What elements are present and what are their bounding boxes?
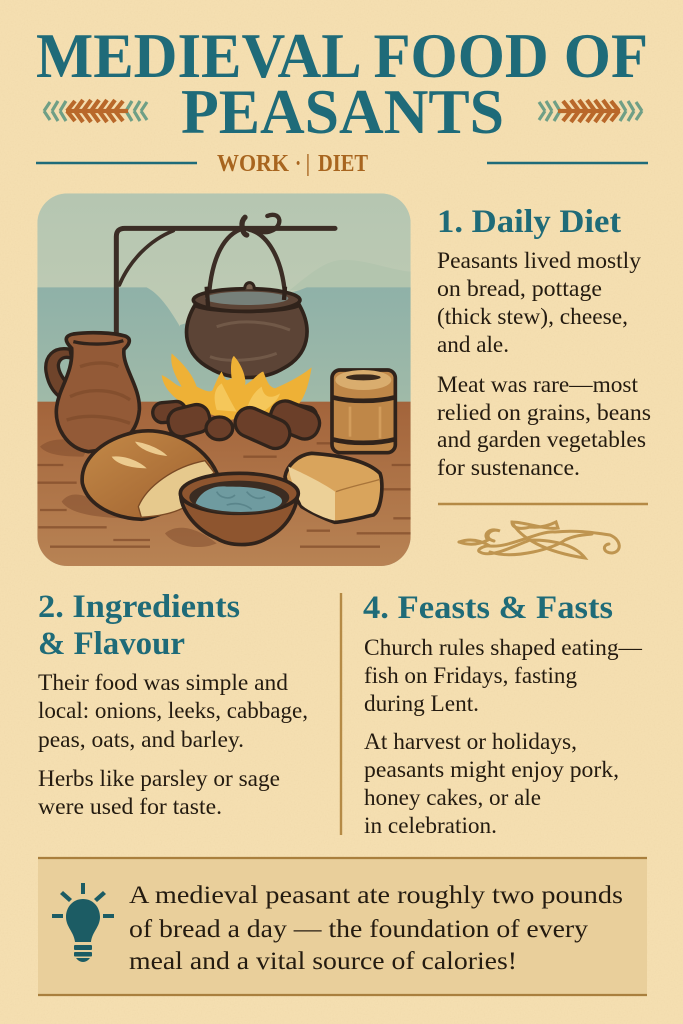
heading: Ingredients & Flavour	[38, 589, 240, 662]
subtitle: · |	[295, 151, 310, 177]
text block: Daily Diet body: and ale.	[437, 332, 509, 357]
text block: Ingredients body: Herbs like parsley or sage	[38, 766, 280, 791]
text block: Feasts body: during Lent.	[364, 691, 479, 716]
text block: Feasts body: fish on Fridays, fasting	[364, 663, 577, 688]
panel: 1. Daily Diet	[437, 204, 651, 480]
text block: Feasts body: At harvest or holidays,	[364, 729, 577, 754]
bowl	[181, 493, 298, 545]
text block: Feasts body: peasants might enjoy pork,	[364, 757, 619, 782]
heading: Ingredients & Flavour: & Flavour	[38, 626, 185, 662]
illustration: cooking pot over fire with bread	[37, 193, 411, 567]
subtitle: DIET	[318, 151, 368, 177]
text block: Daily Diet body: and garden vegetables	[437, 427, 646, 452]
logs	[152, 397, 324, 453]
text block: callout text: of bread a day — the foundation of every	[129, 916, 589, 943]
fire	[162, 353, 312, 420]
icon: flourish ornament	[459, 522, 619, 558]
pot	[187, 305, 307, 378]
text block: Ingredients body: peas, oats, and barley.	[38, 727, 244, 752]
heading: Feasts & Fasts: 4. Feasts & Fasts	[363, 590, 613, 626]
text block: Daily Diet body: (thick stew), cheese,	[437, 304, 628, 329]
text block: Ingredients body: were used for taste.	[38, 794, 222, 819]
text block: callout text: meal and a vital source of calories!	[129, 948, 517, 975]
icon: right wheat ornament	[539, 100, 642, 122]
text block: Daily Diet body: Peasants lived mostly	[437, 248, 642, 273]
jug	[46, 349, 72, 399]
icon: left wheat ornament	[44, 100, 147, 122]
title: MEDIEVAL FOOD OF	[36, 20, 648, 91]
text block: Feasts body: in celebration.	[364, 813, 497, 838]
text block: Daily Diet body: Meat was rare—most	[437, 372, 639, 397]
text block: Ingredients body: Their food was simple and	[38, 670, 289, 695]
text block: Daily Diet body	[437, 248, 651, 480]
text block: Feasts body: honey cakes, or ale	[364, 785, 541, 810]
text block: callout text: A medieval peasant ate roughly two pounds	[129, 882, 623, 909]
panel: 2. Ingredients & Flavour	[38, 589, 308, 819]
text block: Daily Diet body: relied on grains, beans	[437, 400, 651, 425]
title	[36, 20, 648, 147]
crane	[116, 215, 335, 333]
text block: Ingredients body: local: onions, leeks, cabbage,	[38, 698, 308, 723]
text block: Ingredients body	[38, 670, 308, 819]
text block: callout text	[129, 882, 623, 975]
panel: 4. Feasts & Fasts	[363, 590, 643, 838]
heading: Daily Diet: 1. Daily Diet	[437, 204, 621, 240]
round loaf	[82, 431, 217, 519]
subtitle	[217, 151, 368, 177]
text block: Feasts body	[364, 635, 643, 838]
text block: Daily Diet body: for sustenance.	[437, 455, 580, 480]
text block: Feasts body: Church rules shaped eating—	[364, 635, 643, 660]
heading: Ingredients & Flavour: 2. Ingredients	[38, 589, 240, 625]
cheese loaf	[285, 453, 382, 522]
subtitle: WORK	[217, 151, 289, 177]
icon: light bulb	[52, 883, 114, 962]
callout: bread fact	[38, 858, 647, 995]
shadows	[40, 439, 217, 547]
title: PEASANTS	[181, 76, 504, 147]
backdrop	[37, 193, 411, 567]
cup	[332, 370, 395, 453]
text block: Daily Diet body: on bread, pottage	[437, 276, 602, 301]
